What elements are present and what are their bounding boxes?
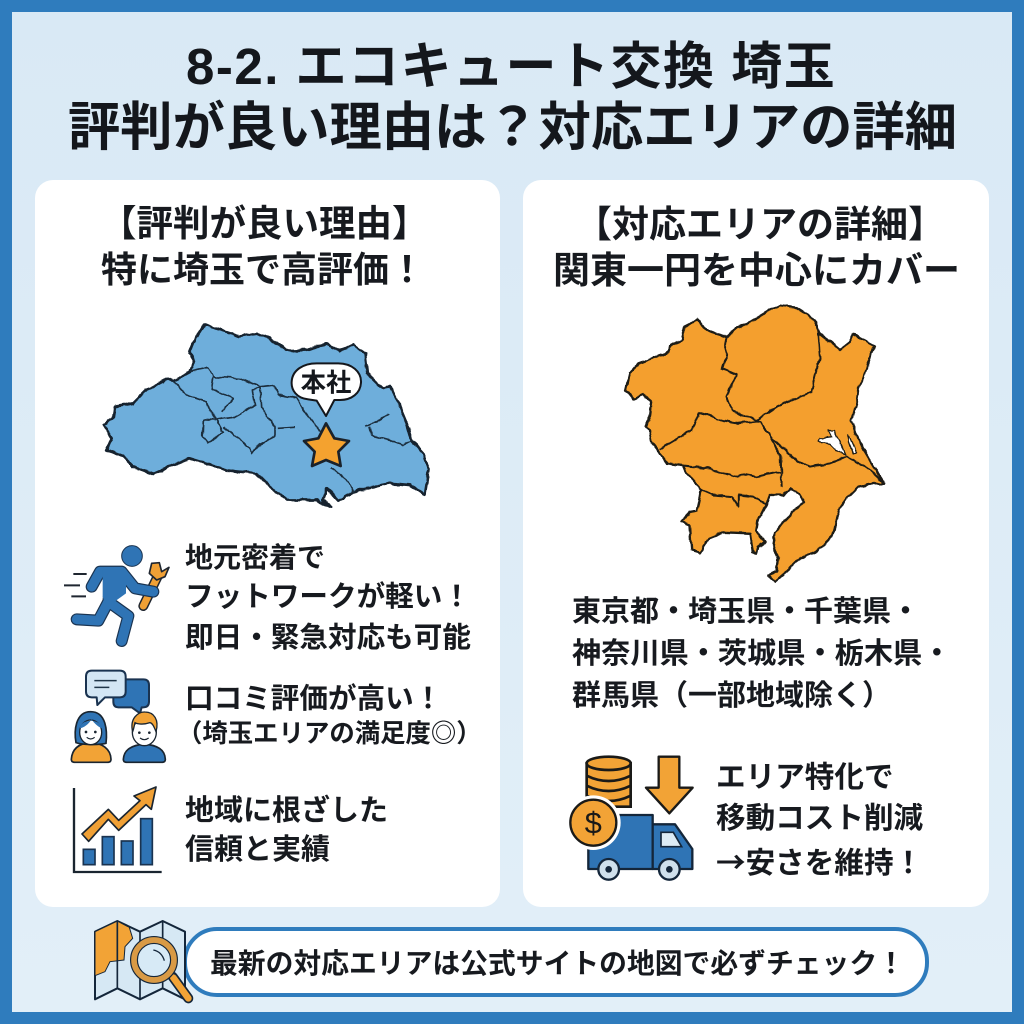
panel: service area	[523, 180, 989, 907]
heading: service area: 関東一円を中心にカバー	[553, 250, 960, 291]
text block: reviews: （埼玉エリアの満足度◎）	[177, 720, 482, 748]
title: 8-2. エコキュート交換 埼玉	[186, 38, 836, 95]
text block: prefectures	[572, 596, 951, 712]
text block: cost reduction: エリア特化で	[716, 761, 894, 794]
heading: reasons: 【評判が良い理由】	[100, 203, 428, 244]
callout bar: 最新の対応エリアは公式サイトの地図で必ずチェック！	[210, 948, 905, 979]
heading: service area: 【対応エリアの詳細】	[575, 204, 945, 245]
icon: growth chart	[72, 786, 162, 874]
icon: coins, down arrow and truck: $	[585, 806, 602, 840]
heading: reasons	[100, 203, 428, 290]
text block: prefectures: 神奈川県・茨城県・栃木県・	[572, 638, 951, 670]
heading: reasons: 特に埼玉で高評価！	[101, 249, 425, 290]
text block: cost reduction	[716, 761, 923, 882]
callout: head office: 本社	[301, 370, 351, 398]
panel: reasons	[35, 180, 500, 907]
text block: trust: 信頼と実績	[185, 834, 330, 866]
text block: prefectures: 東京都・埼玉県・千葉県・	[572, 596, 920, 628]
icon: map with magnifying glass	[94, 920, 194, 1004]
callout bar	[183, 927, 929, 997]
text block: local footwork	[185, 542, 471, 654]
text block: reviews	[177, 683, 482, 748]
map: Kanto region	[624, 304, 886, 583]
title: 評判が良い理由は？対応エリアの詳細	[68, 99, 957, 157]
heading: service area	[553, 204, 960, 291]
icon: star	[304, 423, 349, 466]
text block: local footwork: 即日・緊急対応も可能	[185, 622, 471, 654]
icon: running worker with wrench	[64, 545, 170, 647]
text block: trust	[185, 794, 388, 866]
icon: coins, down arrow and truck	[569, 755, 694, 881]
text block: reviews: 口コミ評価が高い！	[185, 683, 442, 715]
text block: prefectures: 群馬県（一部地域除く）	[572, 680, 891, 712]
text block: trust: 地域に根ざした	[185, 795, 388, 827]
text block: cost reduction: 移動コスト削減	[716, 802, 923, 835]
map: Saitama prefecture	[102, 323, 430, 508]
text block: local footwork: フットワークが軽い！	[185, 581, 471, 613]
callout: head office	[292, 363, 361, 416]
text block: cost reduction: →安さを維持！	[716, 839, 923, 882]
icon: customers talking	[70, 670, 166, 764]
text block: local footwork: 地元密着で	[185, 542, 325, 573]
title	[68, 38, 957, 157]
